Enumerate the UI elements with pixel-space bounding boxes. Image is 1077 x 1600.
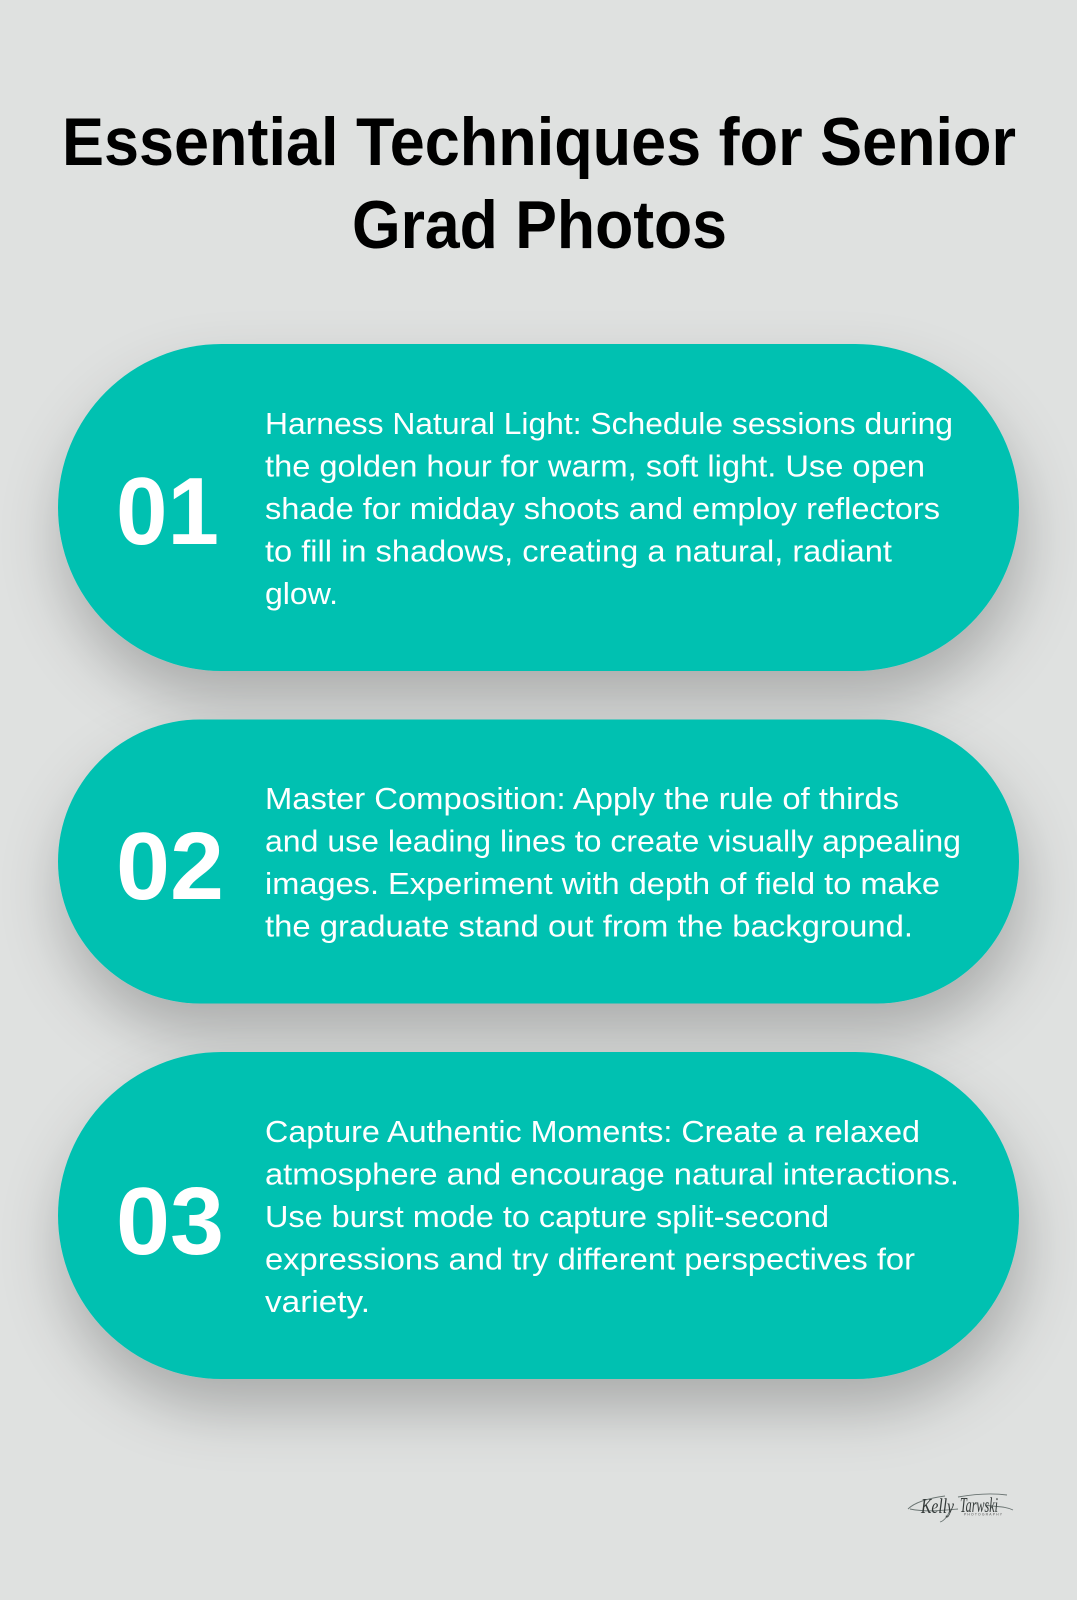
pill background <box>58 1052 1019 1379</box>
text: natural light <box>265 407 953 611</box>
text: authentic moments: Use burst mode to capture split-second <box>265 1200 829 1234</box>
number 01: 01 <box>116 458 219 565</box>
text: authentic moments: Capture Authentic Moments: Create a relaxed <box>265 1115 920 1149</box>
title: Essential Techniques for Senior <box>62 104 1016 180</box>
text: composition: Master Composition: Apply the rule of thirds <box>265 782 899 816</box>
text: authentic moments <box>265 1115 959 1319</box>
text: natural light: shade for midday shoots and employ reflectors <box>265 492 940 526</box>
text: natural light: the golden hour for warm, soft light. Use open <box>265 450 925 484</box>
logo: signature: Kelly <box>920 1494 954 1518</box>
text: composition: the graduate stand out from the background. <box>265 910 913 944</box>
panel: step 03 <box>58 1052 1019 1379</box>
panel: step 01 <box>58 344 1019 671</box>
text: natural light: glow. <box>265 577 338 611</box>
text: composition <box>265 782 961 944</box>
logo: signature: PHOTOGRAPHY <box>964 1512 1003 1516</box>
text: natural light: to fill in shadows, creating a natural, radiant <box>265 534 893 568</box>
text: authentic moments: expressions and try different perspectives for <box>265 1242 915 1276</box>
pill background <box>58 720 1019 1004</box>
logo: signature: Tarwski <box>960 1493 998 1517</box>
pill background <box>58 344 1019 671</box>
text: composition: images. Experiment with depth of field to make <box>265 867 940 901</box>
text: authentic moments: atmosphere and encourage natural interactions. <box>265 1158 959 1192</box>
panel: step 02 <box>58 720 1019 1004</box>
number 02: 02 <box>116 813 224 920</box>
text: natural light: Harness Natural Light: Schedule sessions during <box>265 407 953 441</box>
title <box>62 104 1016 263</box>
number 03: 03 <box>116 1168 224 1275</box>
text: authentic moments: variety. <box>265 1285 370 1319</box>
text: composition: and use leading lines to create visually appealing <box>265 824 961 858</box>
logo: signature <box>908 1493 1013 1522</box>
title: Grad Photos <box>352 187 727 263</box>
